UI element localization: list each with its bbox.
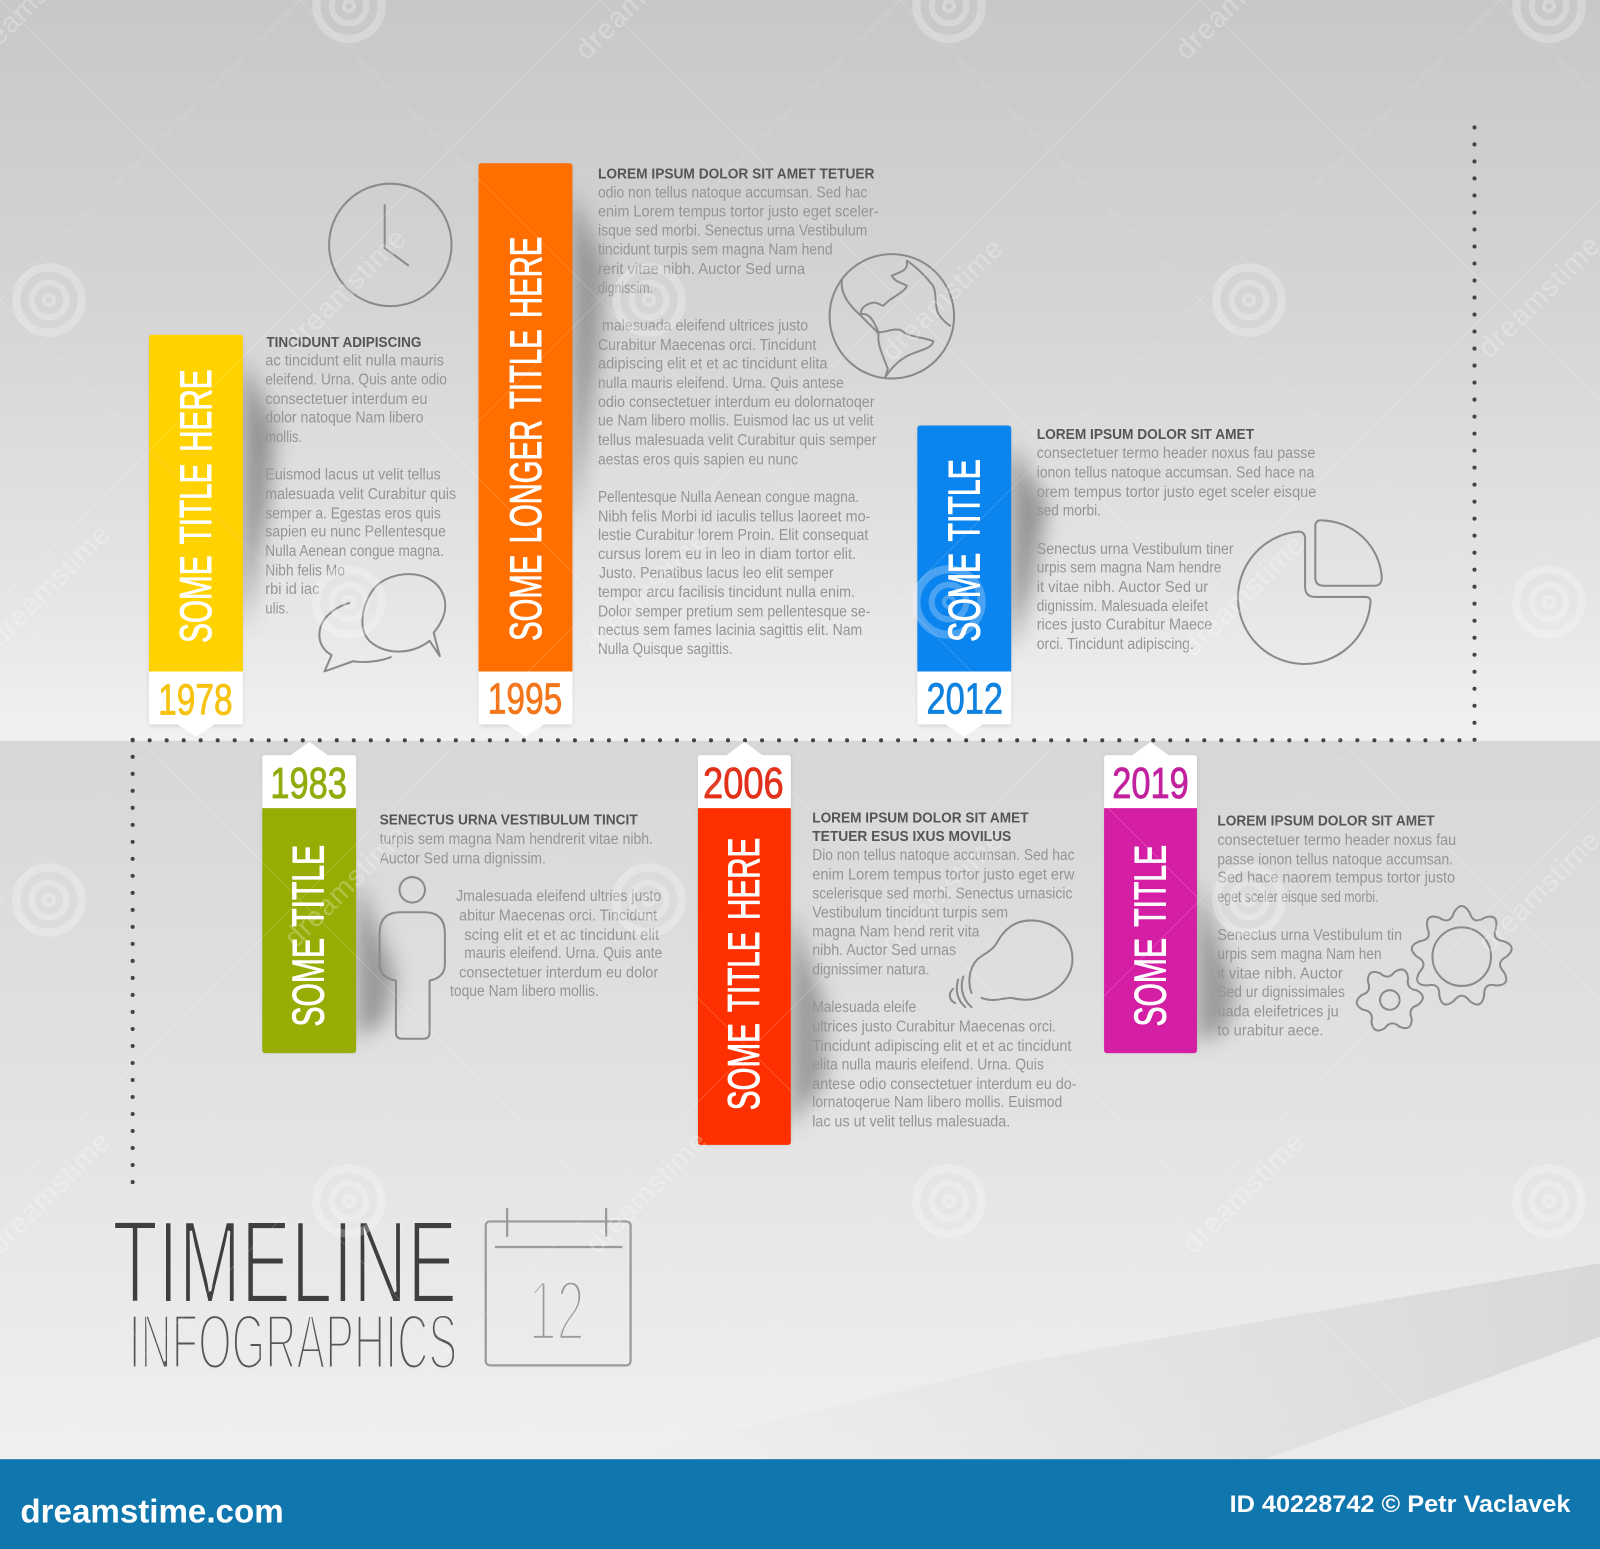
text block: toque Nam libero mollis. [450, 983, 599, 1000]
text block: cursus lorem eu in leo in diam tortor elit. [598, 546, 856, 563]
text block: consectetuer termo header noxus fau [1217, 832, 1456, 849]
text block: tellus malesuada velit Curabitur quis semper [598, 432, 877, 449]
text block: isque sed morbi. Senectus urna Vestibulum [598, 223, 867, 240]
title bar [149, 335, 243, 671]
text block: rbi id iac [265, 581, 320, 598]
year tab 2019: 2019 [1112, 759, 1189, 808]
panel: 2019 [1104, 742, 1512, 1053]
text block: tincidunt turpis sem magna Nam hend [598, 242, 833, 259]
text block: Nibh felis Morbi id iaculis tellus laoreet mo- [598, 508, 870, 525]
text block: LOREM IPSUM DOLOR SIT AMET [1037, 427, 1254, 443]
icon: speech bubbles [319, 574, 445, 671]
footer bar [0, 1459, 1600, 1549]
text block [812, 810, 1077, 1131]
panel: 1995 [479, 163, 954, 737]
text block: nulla mauris eleifend. Urna. Quis antese [598, 375, 844, 392]
text block: lac us ut velit tellus malesuada. [812, 1114, 1010, 1131]
text block: adipiscing elit et et ac tincidunt elita [598, 355, 828, 372]
text block: odio consectetuer interdum eu dolornatoqer [598, 394, 874, 411]
text block: elita nulla mauris eleifend. Urna. Quis [812, 1056, 1044, 1073]
background: upper band [0, 0, 1600, 741]
text block: consectetuer interdum eu dolor [459, 965, 658, 982]
text block: lestie Curabitur lorem Proin. Elit consequat [598, 527, 869, 544]
text block: LOREM IPSUM DOLOR SIT AMET [1217, 814, 1435, 830]
text block [265, 335, 456, 617]
icon: clock [329, 184, 452, 306]
icon: calendar [486, 1208, 631, 1365]
text block: rerit vitae nibh. Auctor Sed urna [598, 261, 806, 278]
watermark overlay: dreamstime [875, 825, 1010, 959]
text block: eget sceler eisque sed morbi. [1217, 889, 1379, 906]
text block: ultrices justo Curabitur Maecenas orci. [812, 1019, 1056, 1036]
text block: Tincidunt adipiscing elit et et ac tincidunt [812, 1038, 1072, 1055]
watermark overlay: dreamstime [579, 1126, 714, 1260]
panel: 2012 [917, 426, 1382, 737]
year tab 2012 [917, 428, 1011, 737]
title bar [698, 808, 791, 1145]
text block: antese odio consectetuer interdum eu do- [812, 1076, 1077, 1093]
text block: SENECTUS URNA VESTIBULUM TINCIT [380, 813, 638, 829]
text block: orem tempus tortor justo eget sceler eisque [1037, 484, 1316, 501]
year tab 2006: 2006 [703, 759, 784, 808]
subheading: INFOGRAPHICS: INFOGRAPHICS [129, 1299, 457, 1385]
text block: ac tincidunt elit nulla mauris [265, 352, 444, 369]
text block: ue Nam libero mollis. Euismod lac us ut velit [598, 413, 874, 430]
title bar: SOME LONGER TITLE HERE [500, 237, 551, 641]
text block: tempor arcu facilisis tincidunt nulla enim. [598, 584, 855, 601]
icon: globe [830, 254, 954, 379]
calendar day number: 12 [529, 1263, 585, 1359]
heading: TIMELINE: TIMELINE [112, 1197, 457, 1329]
text block: enim Lorem tempus tortor justo eget erw [812, 867, 1075, 884]
text block [380, 813, 662, 1000]
text block [598, 167, 879, 658]
year tab 1983 [262, 742, 356, 1052]
title bar: SOME TITLE [1124, 845, 1175, 1027]
text block: nibh. Auctor Sed urnas [812, 942, 956, 959]
text block: scelerisque sed morbi. Senectus urnasicic [812, 885, 1073, 902]
text block: Curabitur Maecenas orci. Tincidunt [598, 337, 817, 354]
year tab 1978 [149, 337, 243, 737]
text block: to urabitur aece. [1217, 1023, 1323, 1040]
text block: mauris eleifend. Urna. Quis ante [464, 945, 662, 962]
text block: Sed ur dignissimales [1217, 984, 1345, 1001]
bar shadow [791, 908, 824, 1128]
text block: dignissimer natura. [812, 962, 930, 979]
text block [1217, 814, 1456, 1040]
text block: it vitae nibh. Auctor Sed ur [1037, 579, 1208, 596]
text block: urpis sem magna Nam hen [1217, 946, 1382, 963]
title bar: SOME TITLE HERE [170, 369, 221, 643]
text block: Nulla Quisque sagittis. [598, 641, 733, 658]
title bar [479, 163, 572, 671]
text block: consectetuer interdum eu [265, 391, 428, 408]
text block: rices justo Curabitur Maece [1037, 617, 1212, 634]
text block: odio non tellus natoque accumsan. Sed hac [598, 184, 868, 201]
title bar [1104, 808, 1197, 1053]
watermark overlay: dreamstime [278, 819, 413, 954]
text block: Pellentesque Nulla Aenean congue magna. [598, 489, 859, 506]
year tab 1995 [479, 165, 572, 737]
text block: TINCIDUNT ADIPISCING [266, 335, 421, 351]
text block: enim Lorem tempus tortor justo eget sceler- [598, 203, 879, 220]
text block: semper a. Egestas eros quis [265, 505, 441, 522]
bar shadow [1197, 878, 1235, 1043]
title bar: SOME TITLE [939, 459, 990, 642]
watermark overlay: dreamstime [579, 524, 714, 658]
icon: light bulb [950, 920, 1072, 1007]
text block: dignissim. Malesuada eleifet [1037, 598, 1209, 615]
background: lower right wedge [612, 1263, 1600, 1459]
text block: it vitae nibh. Auctor [1217, 966, 1343, 983]
panel: 1978 [149, 184, 456, 737]
bar shadow [572, 189, 604, 531]
bar shadow [243, 357, 276, 633]
text block: Euismod lacus ut velit tellus [265, 467, 441, 484]
text block: consectetuer termo header noxus fau passe [1037, 445, 1315, 462]
year tab 1995: 1995 [488, 674, 562, 723]
text block: LOREM IPSUM DOLOR SIT AMET TETUER [598, 167, 875, 183]
footer credit: ID 40228742 © Petr Vaclavek [1230, 1491, 1571, 1518]
icon: person [380, 877, 445, 1039]
text block: turpis sem magna Nam hendrerit vitae nibh. [380, 831, 653, 848]
text block: orci. Tincidunt adipiscing. [1037, 636, 1194, 653]
text block: sapien eu nunc Pellentesque [265, 524, 446, 541]
text block: Malesuada eleife [812, 999, 916, 1016]
text block: uada eleifetrices ju [1217, 1003, 1339, 1020]
text block: eleifend. Urna. Quis ante odio [265, 372, 447, 389]
year tab 2019 [1104, 742, 1197, 1052]
text block: ionon tellus natoque accumsan. Sed hace na [1037, 465, 1315, 482]
text block: Jmalesuada eleifend ultries justo [456, 888, 661, 905]
text block: TETUER ESUS IXUS MOVILUS [812, 829, 1011, 845]
text block: Nibh felis Mo [265, 563, 345, 580]
icon: pie chart [1238, 520, 1382, 664]
bar shadow [1011, 444, 1047, 653]
text block: Sed hace naorem tempus tortor justo [1217, 870, 1455, 887]
text block: Nulla Aenean congue magna. [265, 543, 444, 560]
text block: urpis sem magna Nam hendre [1037, 559, 1221, 576]
text block [1037, 427, 1316, 653]
text block: mollis. [265, 429, 302, 446]
year tab 2012: 2012 [927, 674, 1003, 723]
panel: 1983 [262, 742, 662, 1053]
background: lower band [0, 741, 1600, 1459]
bar shadow [356, 878, 396, 1039]
title bar [262, 808, 356, 1053]
text block: malesuada velit Curabitur quis [265, 486, 456, 503]
year tab 2006 [698, 742, 791, 1144]
watermark overlay: dreamstime [278, 223, 413, 357]
text block: dignissim. [598, 280, 653, 297]
text block: scing elit et et ac tincidunt elit [464, 927, 660, 944]
text block: abitur Maecenas orci. Tincidunt [459, 907, 658, 924]
text block: sed morbi. [1037, 502, 1101, 519]
footer logo: dreamstime.com [20, 1493, 284, 1530]
text block: ulis. [265, 600, 289, 617]
watermark overlay: dreamstime [1176, 529, 1311, 663]
text block: nectus sem fames lacinia sagittis elit. Nam [598, 622, 862, 639]
panel: 2006 [698, 742, 1077, 1145]
text block: LOREM IPSUM DOLOR SIT AMET [812, 810, 1029, 826]
text block: Vestibulum tincidunt turpis sem [812, 904, 1008, 921]
title bar: SOME TITLE [282, 845, 333, 1027]
title: TIMELINE INFOGRAPHICS [112, 1197, 457, 1385]
text block: Auctor Sed urna dignissim. [380, 850, 546, 867]
text block: lornatoqerue Nam libero mollis. Euismod [812, 1094, 1062, 1111]
text block: magna Nam hend rerit vita [812, 924, 980, 941]
text block: Dio non tellus natoque accumsan. Sed hac [812, 847, 1075, 864]
title bar [917, 426, 1011, 671]
text block: malesuada eleifend ultrices justo [602, 318, 808, 335]
year tab 1978: 1978 [158, 675, 233, 724]
icon: gears [1349, 906, 1512, 1043]
text block: aestas eros quis sapien eu nunc [598, 451, 798, 468]
dotted timeline axis [133, 127, 1476, 1186]
watermark overlay: dreamstime [875, 233, 1010, 367]
title bar: SOME TITLE HERE [718, 838, 769, 1110]
text block: Senectus urna Vestibulum tin [1217, 927, 1402, 944]
text block: dolor natoque Nam libero [265, 409, 423, 426]
text block: passe ionon tellus natoque accumsan. [1217, 851, 1453, 868]
year tab 1983: 1983 [270, 759, 347, 808]
watermark overlay: dreamstime [1176, 1126, 1311, 1260]
text block: Senectus urna Vestibulum tiner [1037, 541, 1234, 558]
text block: Justo. Penatibus lacus leo elit semper [599, 565, 834, 582]
text block: Dolor semper pretium sem pellentesque se- [598, 603, 870, 620]
